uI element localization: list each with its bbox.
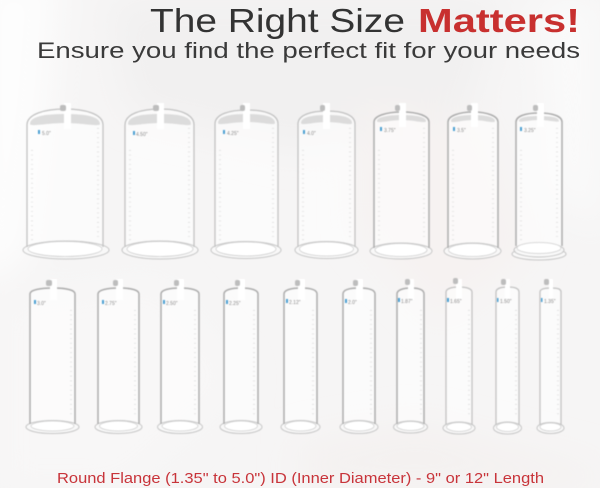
cylinder 2.25 inch [220,279,262,434]
cylinder 1.75 inch: 1.65" [450,299,462,305]
title [150,2,580,39]
cylinder 3.5 inch: 3.5" [457,128,466,134]
cylinder 2.0 inch [340,279,378,434]
cylinder 1.35 inch: 1.35" [544,299,556,305]
cylinder 4.0 inch: 4.0" [307,131,316,137]
cylinder 5.0 inch: 5.0" [42,131,51,137]
cylinder 2.75 inch: 2.75" [105,301,117,307]
cylinder 4.25 inch [211,103,281,258]
cylinder 4.5 inch [122,103,198,259]
cylinder 2.125 inch: 2.12" [289,300,301,306]
cylinder 5.0 inch [23,103,109,259]
cylinder 2.0 inch: 2.0" [348,300,357,306]
cylinder 1.35 inch [537,279,564,434]
title: The Right Size [150,2,405,39]
cylinder 1.875 inch [394,279,428,433]
cylinder 2.125 inch [281,279,320,434]
cylinder 2.75 inch [95,279,142,434]
title: Matters! [418,2,580,39]
cylinder 1.5 inch [494,279,522,434]
cylinder 1.5 inch: 1.50" [500,299,512,305]
cylinder 4.5 inch: 4.50" [136,132,148,138]
cylinder 4.25 inch: 4.25" [227,131,239,137]
cylinder 3.25 inch: 3.25" [524,128,536,134]
cylinder 1.875 inch: 1.87" [401,299,413,305]
cylinder 3.75 inch [370,103,432,259]
cylinder 1.75 inch [443,278,475,434]
cylinder 2.25 inch: 2.25" [229,301,241,307]
subtitle: Ensure you find the perfect fit for your needs [37,38,580,63]
cylinder 3.25 inch [512,103,566,260]
cylinder 4.0 inch [295,103,358,258]
cylinder 2.5 inch: 2.50" [166,301,178,307]
cylinder 3.75 inch: 3.75" [384,128,396,134]
cylinder 2.5 inch [158,279,202,434]
cylinder 3.5 inch [444,103,501,259]
cylinder 3.0 inch: 3.0" [37,301,46,307]
footer caption: Round Flange (1.35" to 5.0") ID (Inner Diameter) - 9" or 12" Length [57,471,544,487]
cylinder 3.0 inch [26,279,79,434]
